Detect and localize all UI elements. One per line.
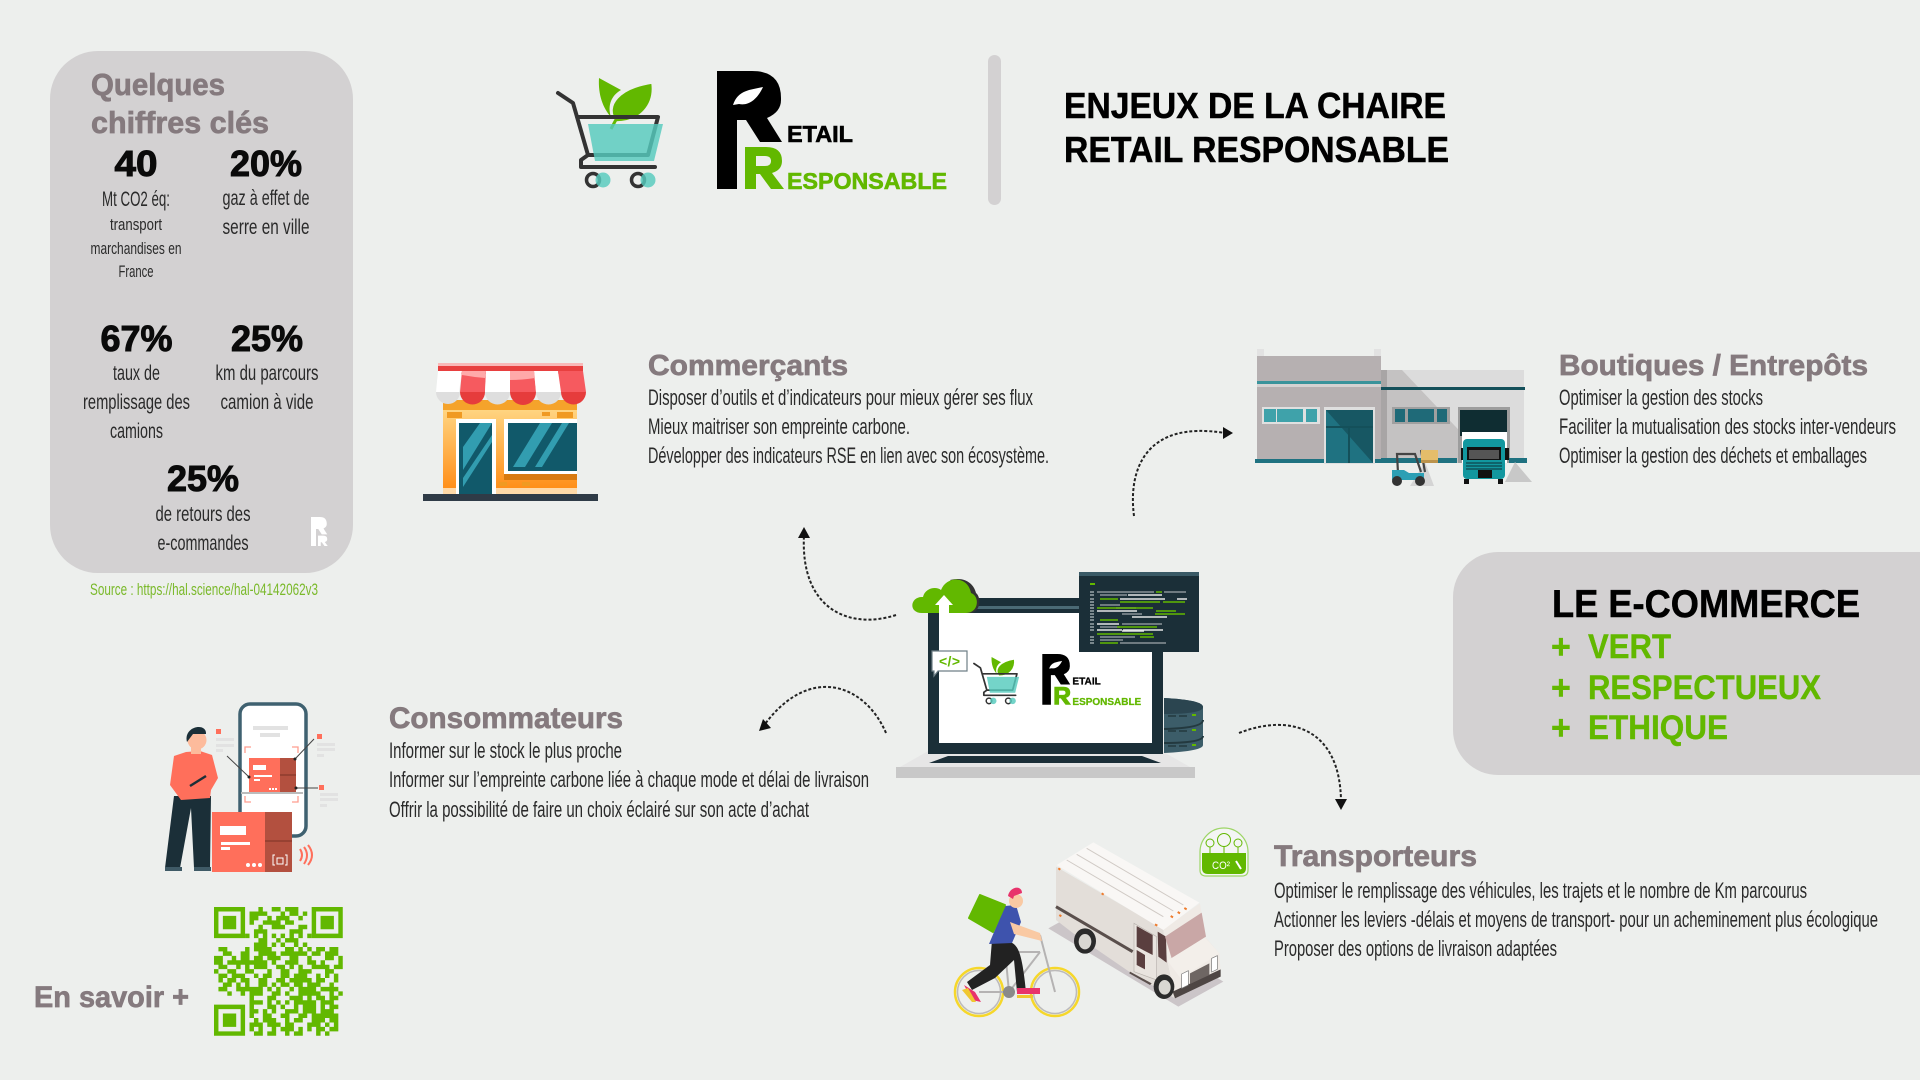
logo: big R with wordmark — [717, 71, 947, 194]
panel heading: chiffres clés — [91, 105, 269, 140]
text block: transporteurs — [1274, 840, 1878, 961]
arrow: to transporteurs — [1239, 725, 1347, 810]
stat: 25% retours: 25% — [167, 458, 239, 499]
title — [1064, 85, 1449, 170]
QR code — [214, 909, 343, 1034]
text block: consommateurs: Offrir la possibilité de faire un choix éclairé sur son acte d’achat — [389, 797, 809, 822]
stat: 40 Mt CO2: Mt CO2 éq: — [102, 188, 170, 211]
man — [165, 727, 218, 871]
stat: 67% — [83, 318, 190, 443]
stat: 40 Mt CO2: France — [118, 262, 154, 281]
code window — [1079, 572, 1199, 652]
stat: 25% km: 25% — [231, 318, 303, 359]
panel: quelques chiffres clés — [50, 51, 353, 573]
icon: warehouse with truck and forklift — [1255, 349, 1532, 486]
source link: Source : https://hal.science/hal-04142062v3 — [90, 580, 318, 599]
stat: 67%: taux de — [113, 362, 160, 385]
screen logo: ESPONSABLE — [1072, 697, 1142, 708]
arrow: to boutiques — [1133, 427, 1233, 516]
screen logo — [974, 654, 1142, 708]
forklift — [1392, 450, 1438, 486]
illustration: consumer with phone and parcels — [165, 704, 338, 872]
logo: big R with wordmark: ESPONSABLE — [787, 168, 947, 194]
text block: commerçants: Développer des indicateurs RSE en lien avec son écosystème. — [648, 443, 1049, 468]
icon: co2 badge — [1200, 828, 1248, 876]
list item: respectueux: + — [1551, 669, 1571, 707]
text block: transporteurs: Transporteurs — [1274, 840, 1477, 873]
icon: shopping cart with leaves — [558, 78, 663, 188]
arrow: to commerçants — [798, 527, 896, 620]
logo: cart and retail responsable — [558, 71, 947, 194]
text block: commerçants: Mieux maitriser son empreinte carbone. — [648, 414, 910, 439]
title: RETAIL RESPONSABLE — [1064, 129, 1449, 170]
wifi waves — [300, 845, 312, 865]
stat: 67%: remplissage des — [83, 391, 190, 414]
illustration: bike courier — [955, 888, 1079, 1016]
text block: consommateurs: Informer sur le stock le plus proche — [389, 738, 622, 763]
panel heading: Quelques — [91, 67, 225, 102]
icon: co2 badge: CO² — [1212, 860, 1230, 872]
text block: consommateurs — [389, 702, 869, 822]
illustration: laptop platform — [896, 572, 1203, 778]
awning stripes — [436, 371, 586, 405]
icon: small white logo — [311, 517, 328, 546]
list item: respectueux: RESPECTUEUX — [1588, 669, 1821, 707]
divider bar — [988, 55, 1001, 205]
stat: 20%: gaz à effet de — [222, 187, 310, 210]
stat: 40 Mt CO2: 40 — [114, 143, 158, 184]
stat: 20%: serre en ville — [222, 216, 310, 239]
list item: vert — [1551, 628, 1671, 666]
title: ENJEUX DE LA CHAIRE — [1064, 85, 1446, 126]
stat: 40 Mt CO2 — [90, 143, 182, 281]
list item: vert: + — [1551, 628, 1571, 666]
stat: 25% retours: de retours des — [156, 503, 250, 526]
stat: 25% retours — [156, 458, 250, 555]
stat: 40 Mt CO2: transport — [110, 215, 162, 234]
icon: code bubble: </> — [939, 653, 960, 669]
stat: 67%: camions — [110, 420, 163, 443]
icon: shop storefront — [423, 363, 598, 501]
text block: commerçants — [648, 350, 1049, 468]
stat: 25% retours: e-commandes — [158, 532, 248, 555]
panel heading — [91, 67, 269, 140]
logo: big R with wordmark: ETAIL — [787, 121, 853, 147]
panel: le e-commerce: LE E-COMMERCE — [1552, 583, 1860, 626]
stat: 20%: 20% — [230, 143, 302, 184]
list item: ethique: + — [1551, 709, 1571, 747]
stat: 25% km — [216, 318, 318, 414]
panel: le e-commerce — [1453, 552, 1920, 775]
icon: code bubble — [932, 651, 967, 676]
text block: boutiques entrepôts: Optimiser la gestion des stocks — [1559, 385, 1763, 410]
list item: vert: VERT — [1588, 628, 1671, 666]
icon: database — [1164, 698, 1203, 753]
callout lines — [216, 729, 338, 807]
text block: consommateurs: Consommateurs — [389, 702, 623, 735]
en savoir plus: En savoir + — [34, 981, 189, 1014]
parcel — [212, 812, 292, 872]
list item: ethique: ETHIQUE — [1588, 709, 1728, 747]
icon: cloud upload — [912, 579, 979, 613]
text block: transporteurs: Proposer des options de livraison adaptées — [1274, 936, 1557, 961]
stat: 67%: 67% — [100, 318, 172, 359]
stat: 20% — [222, 143, 310, 239]
stat: 25% km: km du parcours — [216, 362, 318, 385]
illustration: delivery van — [1048, 842, 1223, 1007]
text block: commerçants: Disposer d’outils et d’indicateurs pour mieux gérer ses flux — [648, 385, 1033, 410]
truck — [1461, 439, 1509, 484]
text block: consommateurs: Informer sur l’empreinte carbone liée à chaque mode et délai de livraison — [389, 767, 869, 792]
phone — [240, 704, 306, 836]
text block: boutiques entrepôts — [1559, 350, 1896, 468]
stat: 40 Mt CO2: marchandises en — [90, 239, 182, 258]
text block: boutiques entrepôts: Boutiques / Entrepôts — [1559, 350, 1868, 382]
stat: 25% km: camion à vide — [220, 391, 314, 414]
screen logo: ETAIL — [1072, 677, 1101, 688]
text block: commerçants: Commerçants — [648, 350, 848, 382]
arrow: to consommateurs — [759, 687, 886, 733]
